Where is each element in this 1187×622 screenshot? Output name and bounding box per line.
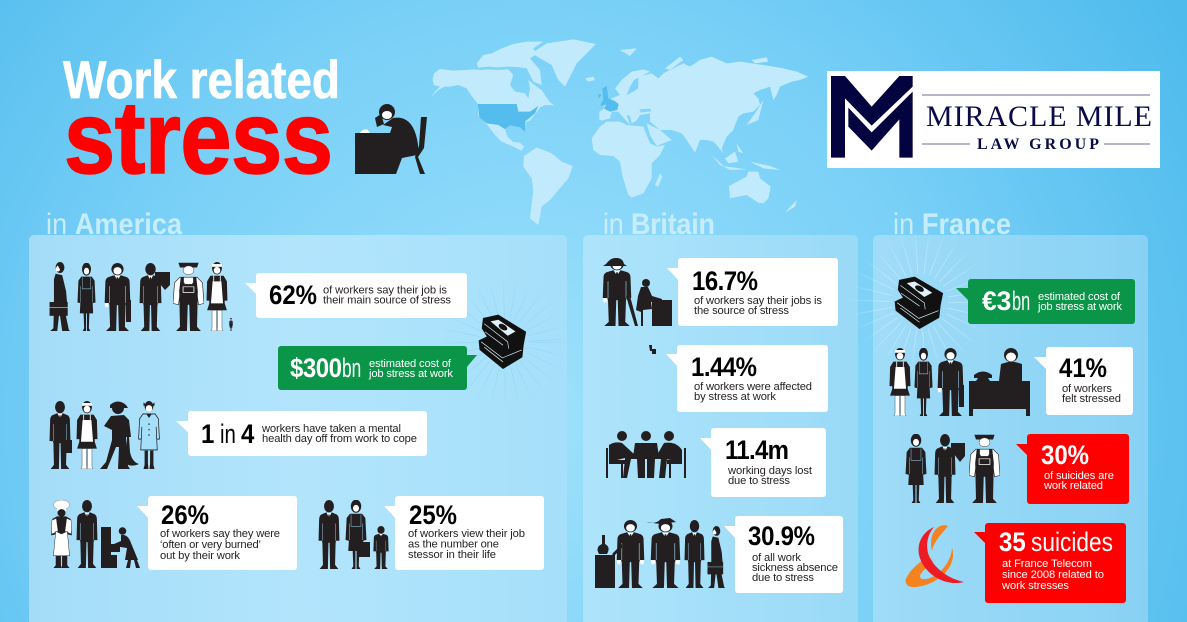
figures: woman, man with clipboard, worker bbox=[906, 434, 1000, 503]
title: Work related bbox=[63, 50, 340, 110]
money rays bbox=[460, 297, 550, 387]
callout: 35 suicides: since 2008 related to bbox=[1002, 569, 1104, 581]
callout: €3bn bbox=[956, 279, 1135, 324]
callout: 35 suicides: suicides bbox=[1031, 528, 1113, 557]
callout: 1.44%: 1.44% bbox=[691, 353, 757, 382]
callout: 62%: their main source of stress bbox=[323, 294, 451, 306]
callout: 1 in 4: workers have taken a mental bbox=[261, 423, 401, 435]
callout: 25%: 25% bbox=[409, 501, 457, 530]
callout: $300bn: $300 bbox=[290, 354, 342, 383]
world map bbox=[432, 39, 808, 225]
figure: miner with pick bbox=[100, 402, 139, 469]
callout: 26%: of workers say they were bbox=[160, 528, 280, 540]
icon: France Telecom logo bbox=[906, 525, 964, 587]
people row 1 bbox=[50, 262, 233, 331]
callout: 41% bbox=[1034, 347, 1133, 415]
callout: 35 suicides: work stresses bbox=[1001, 580, 1069, 592]
callout: $300bn: estimated cost of bbox=[369, 358, 452, 370]
callout: 30%: work related bbox=[1043, 480, 1103, 492]
icon: money stack bbox=[479, 315, 526, 369]
callout: 16.7%: the source of stress bbox=[694, 305, 789, 317]
callout: 25%: stessor in their life bbox=[408, 549, 496, 561]
callout: 26%: 26% bbox=[161, 501, 209, 530]
callout: $300bn: bn bbox=[342, 353, 361, 383]
callout: 41%: 41% bbox=[1059, 354, 1107, 383]
callout: 41%: of workers bbox=[1062, 383, 1112, 395]
callout: 30.9%: due to stress bbox=[752, 572, 814, 584]
callout: 41%: felt stressed bbox=[1062, 393, 1121, 405]
callout: 35 suicides: at France Telecom bbox=[1002, 558, 1092, 570]
panel: France bbox=[870, 208, 1148, 622]
callout: 26%: ‘often or very burned’ bbox=[160, 539, 261, 551]
callout: 30.9% bbox=[724, 516, 843, 593]
callout: 25%: as the number one bbox=[408, 538, 499, 550]
callout: 30%: of suicides are bbox=[1044, 470, 1114, 482]
callout: €3bn: bn bbox=[1012, 286, 1030, 316]
callout: €3bn: estimated cost of bbox=[1038, 291, 1121, 303]
Australia and islands bbox=[585, 48, 797, 213]
callout: 1 in 4: 1 bbox=[201, 420, 214, 449]
panel: Britain bbox=[583, 208, 858, 622]
callout: 26%: out by their work bbox=[160, 550, 240, 562]
logo: Miracle Mile Law Group: MIRACLE MILE bbox=[926, 100, 1152, 133]
title: stress bbox=[64, 80, 333, 195]
callout: $300bn: job stress at work bbox=[368, 368, 453, 380]
callout: 25%: of workers view their job bbox=[408, 528, 525, 540]
callout: 62%: 62% bbox=[269, 281, 317, 310]
logo: Miracle Mile Law Group bbox=[827, 71, 1160, 168]
callout: 1.44%: by stress at work bbox=[694, 391, 776, 403]
North America bbox=[432, 69, 554, 151]
callout: €3bn: €3 bbox=[982, 286, 1011, 316]
callout: 16.7%: of workers say their jobs is bbox=[694, 295, 822, 307]
callout: 30.9%: of all work bbox=[752, 552, 801, 564]
UK and France highlighted bbox=[598, 86, 619, 112]
logo: Miracle Mile Law Group: LAW GROUP bbox=[977, 136, 1099, 153]
callout: 16.7%: 16.7% bbox=[692, 267, 758, 296]
callout: 35 suicides bbox=[974, 523, 1126, 603]
callout: 1.44%: of workers were affected bbox=[694, 381, 812, 393]
figures: meeting at table bbox=[606, 431, 686, 478]
callout: 30% bbox=[1016, 434, 1129, 504]
callout: 1.44% bbox=[666, 345, 828, 412]
panel: Britain: in Britain bbox=[603, 208, 715, 240]
people row 2 bbox=[50, 401, 159, 469]
callout: 1 in 4: in bbox=[220, 420, 236, 449]
callout: 62% bbox=[245, 273, 467, 318]
callout: 11.4m bbox=[700, 428, 826, 497]
Arctic islands bbox=[477, 42, 543, 85]
callout: 30.9%: 30.9% bbox=[748, 522, 815, 551]
figures: maid, woman, man, receptionist bbox=[890, 348, 1030, 416]
United States highlighted bbox=[478, 104, 538, 132]
logo rules bbox=[922, 95, 1150, 144]
figures: scientist, pilot, officer, walker bbox=[595, 518, 725, 588]
callout: 1 in 4 bbox=[176, 411, 427, 456]
icon: money stack bbox=[895, 277, 943, 329]
callout: 30.9%: sickness absence bbox=[752, 562, 838, 574]
figures: man with umbrella and seated woman bbox=[603, 258, 672, 326]
logo mark bbox=[831, 76, 913, 158]
callout: 62%: of workers say their job is bbox=[323, 284, 447, 296]
callout: 1 in 4: health day off from work to cope bbox=[262, 433, 417, 445]
panel: France: in France bbox=[893, 208, 1011, 240]
callout: 11.4m: 11.4m bbox=[725, 436, 789, 465]
callout: 11.4m: working days lost bbox=[727, 465, 813, 477]
callout: 11.4m: due to stress bbox=[728, 475, 790, 487]
callout: $300bn bbox=[278, 346, 477, 390]
South America bbox=[523, 147, 573, 225]
money rays bbox=[870, 252, 970, 352]
panel: America: in America bbox=[46, 208, 182, 240]
callout: 25% bbox=[384, 496, 544, 570]
Greenland bbox=[532, 39, 596, 87]
Black Sea bbox=[639, 109, 651, 112]
Africa and Arabia bbox=[592, 122, 672, 198]
callout: 1 in 4: 4 bbox=[241, 420, 254, 449]
callout: €3bn: job stress at work bbox=[1037, 301, 1122, 313]
people row 3 bbox=[51, 500, 140, 568]
icon: tiny figure bbox=[649, 345, 656, 354]
icon: stressed person at desk bbox=[355, 104, 427, 174]
panel: America bbox=[29, 208, 567, 622]
callout: 26% bbox=[137, 496, 297, 570]
callout: 35 suicides: 35 bbox=[999, 528, 1026, 557]
Eurasia bbox=[599, 57, 808, 153]
callout: 30%: 30% bbox=[1041, 441, 1089, 470]
callout: 16.7% bbox=[667, 258, 838, 326]
people group 5 bbox=[319, 500, 389, 569]
